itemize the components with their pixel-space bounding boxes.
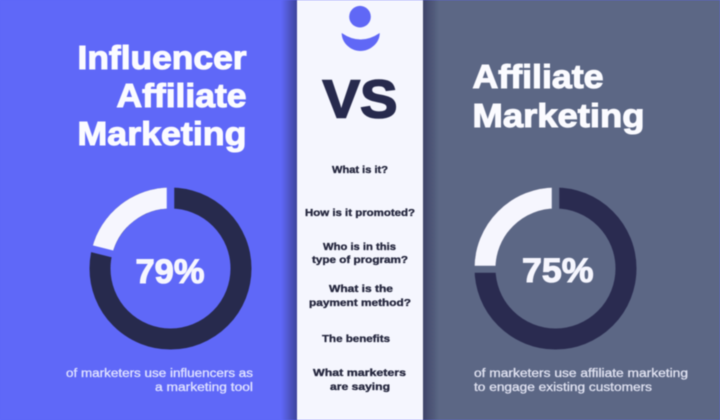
question: benefits: The benefits xyxy=(322,333,390,345)
question: program type: Who is in this xyxy=(323,241,396,253)
question: what is it: What is it? xyxy=(332,164,388,176)
heading: influencer affiliate marketing: Affiliate xyxy=(116,77,246,114)
heading: affiliate marketing: Marketing xyxy=(472,97,644,134)
question: marketer opinions: What marketers xyxy=(313,367,406,379)
donut value: 75% xyxy=(522,252,594,290)
question: promotion: How is it promoted? xyxy=(305,207,415,219)
donut value: 79% xyxy=(136,253,204,291)
question: marketer opinions xyxy=(313,367,406,393)
caption: influencer statistic xyxy=(66,368,253,394)
question: program type: type of program? xyxy=(312,254,408,266)
panel: influencer affiliate marketing xyxy=(0,0,297,420)
caption: influencer statistic: of marketers use influencers as xyxy=(66,368,253,380)
donut chart: 79% xyxy=(85,180,241,339)
heading: VS: VS xyxy=(322,70,398,130)
caption: affiliate statistic: to engage existing customers xyxy=(474,382,652,394)
icon: person logo xyxy=(342,6,380,51)
heading: affiliate marketing xyxy=(472,58,644,134)
heading: influencer affiliate marketing: Influencer xyxy=(78,39,247,76)
question: payment method xyxy=(309,283,411,309)
heading: affiliate marketing: Affiliate xyxy=(472,58,604,95)
caption: affiliate statistic: of marketers use affiliate marketing xyxy=(474,368,688,380)
question: payment method: payment method? xyxy=(309,297,411,309)
heading: influencer affiliate marketing: Marketing xyxy=(78,115,246,152)
donut chart: 75% xyxy=(470,180,626,339)
panel: affiliate marketing xyxy=(423,0,720,420)
panel: center comparison column xyxy=(297,0,423,420)
question: marketer opinions: are saying xyxy=(330,381,390,393)
caption: affiliate statistic xyxy=(474,368,688,394)
list: comparison questions xyxy=(305,164,415,393)
caption: influencer statistic: a marketing tool xyxy=(155,382,253,394)
question: program type xyxy=(312,241,408,266)
heading: influencer affiliate marketing xyxy=(78,39,247,152)
question: payment method: What is the xyxy=(329,283,393,295)
